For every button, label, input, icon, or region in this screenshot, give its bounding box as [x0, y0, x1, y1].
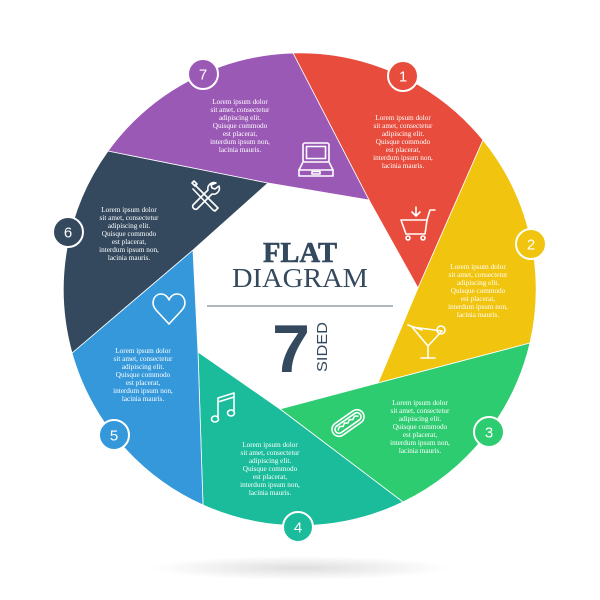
badge 6 [53, 217, 83, 247]
text 1: est placerat, [386, 146, 420, 154]
text 3: adipiscing elit. [399, 415, 441, 423]
badge 3 [474, 417, 504, 447]
text 3: est placerat, [403, 431, 437, 439]
text 4 [240, 441, 300, 497]
badge 6: 6 [64, 224, 72, 242]
text 4: Quisque commodo [243, 465, 298, 473]
text 3: sit amet, consectetur [391, 407, 450, 415]
text 5: adipiscing elit. [122, 363, 164, 371]
text 7: Quisque commodo [213, 122, 268, 130]
title [232, 237, 368, 293]
text 1: sit amet, consectetur [374, 122, 433, 130]
segment 4 teal [198, 352, 403, 526]
text 7: interdum ipsum non, [210, 138, 270, 146]
text 2: Quisque commodo [451, 287, 506, 295]
text 5: Lorem ipsum dolor [115, 347, 171, 355]
text 6: interdum ipsum non, [99, 246, 159, 254]
text 2 [448, 263, 508, 319]
badge 4: 4 [294, 520, 302, 536]
segment 1 red [293, 53, 483, 288]
text 5: sit amet, consectetur [114, 355, 173, 363]
text 1: interdum ipsum non, [373, 154, 433, 162]
icon: cocktail [408, 325, 445, 358]
badge 2 [516, 229, 546, 259]
text 2: sit amet, consectetur [449, 271, 508, 279]
text 7: est placerat, [223, 130, 257, 138]
icon: cart [401, 207, 435, 240]
text 1: Quisque commodo [376, 138, 431, 146]
segment 5 blue [72, 250, 203, 505]
icon: hotdog [329, 407, 367, 439]
icon: heart [153, 294, 185, 324]
segment 7 purple [108, 53, 369, 200]
text 7: adipiscing elit. [219, 114, 261, 122]
badge 5: 5 [110, 428, 118, 444]
big 7 sided: SIDED [314, 322, 331, 372]
text 5: interdum ipsum non, [113, 387, 173, 395]
text 6 [99, 206, 159, 262]
badge 7 [188, 59, 218, 89]
text 6: adipiscing elit. [108, 222, 150, 230]
shadow [150, 556, 450, 580]
text 4: Lorem ipsum dolor [242, 441, 298, 449]
text 4: interdum ipsum non, [240, 481, 300, 489]
text 3: interdum ipsum non, [390, 439, 450, 447]
badge 7: 7 [199, 66, 207, 84]
text 7: Lorem ipsum dolor [212, 98, 268, 106]
badge 1 [388, 61, 418, 91]
text 6: est placerat, [112, 238, 146, 246]
text 6: Lorem ipsum dolor [101, 206, 157, 214]
text 3: lacinia mauris. [399, 447, 441, 455]
text 4: est placerat, [253, 473, 287, 481]
text 7: sit amet, consectetur [211, 106, 270, 114]
text 7: lacinia mauris. [219, 146, 261, 154]
text 3: Quisque commodo [393, 423, 448, 431]
text 1: lacinia mauris. [382, 162, 424, 170]
text 1: adipiscing elit. [382, 130, 424, 138]
text 5 [113, 347, 173, 403]
text 6: Quisque commodo [102, 230, 157, 238]
text 4: sit amet, consectetur [241, 449, 300, 457]
badge 1: 1 [399, 68, 407, 86]
segment 6 dark [63, 151, 268, 353]
text 1 [373, 114, 433, 170]
big 7 sided [272, 311, 331, 387]
segment 3 green [280, 343, 530, 502]
badge 4 [283, 512, 313, 542]
icon: laptop [299, 143, 333, 176]
text 7 [210, 98, 270, 154]
icon: music [212, 393, 234, 422]
text 2: lacinia mauris. [457, 311, 499, 319]
text 6: sit amet, consectetur [100, 214, 159, 222]
divider [207, 305, 393, 307]
badge 2: 2 [527, 236, 535, 254]
segment 2 yellow [378, 140, 536, 383]
text 1: Lorem ipsum dolor [375, 114, 431, 122]
text 2: interdum ipsum non, [448, 303, 508, 311]
title: FLAT [263, 237, 337, 269]
text 6: lacinia mauris. [108, 254, 150, 262]
text 2: est placerat, [461, 295, 495, 303]
big 7 sided: 7 [272, 311, 310, 387]
text 3 [390, 399, 450, 455]
text 5: est placerat, [126, 379, 160, 387]
text 4: adipiscing elit. [249, 457, 291, 465]
text 3: Lorem ipsum dolor [392, 399, 448, 407]
text 4: lacinia mauris. [249, 489, 291, 497]
icon: tools [192, 181, 219, 211]
badge 5 [99, 420, 129, 450]
badge 3: 3 [485, 424, 493, 442]
text 2: Lorem ipsum dolor [450, 263, 506, 271]
text 5: Quisque commodo [116, 371, 171, 379]
title: DIAGRAM [232, 263, 368, 293]
text 2: adipiscing elit. [457, 279, 499, 287]
text 5: lacinia mauris. [122, 395, 164, 403]
